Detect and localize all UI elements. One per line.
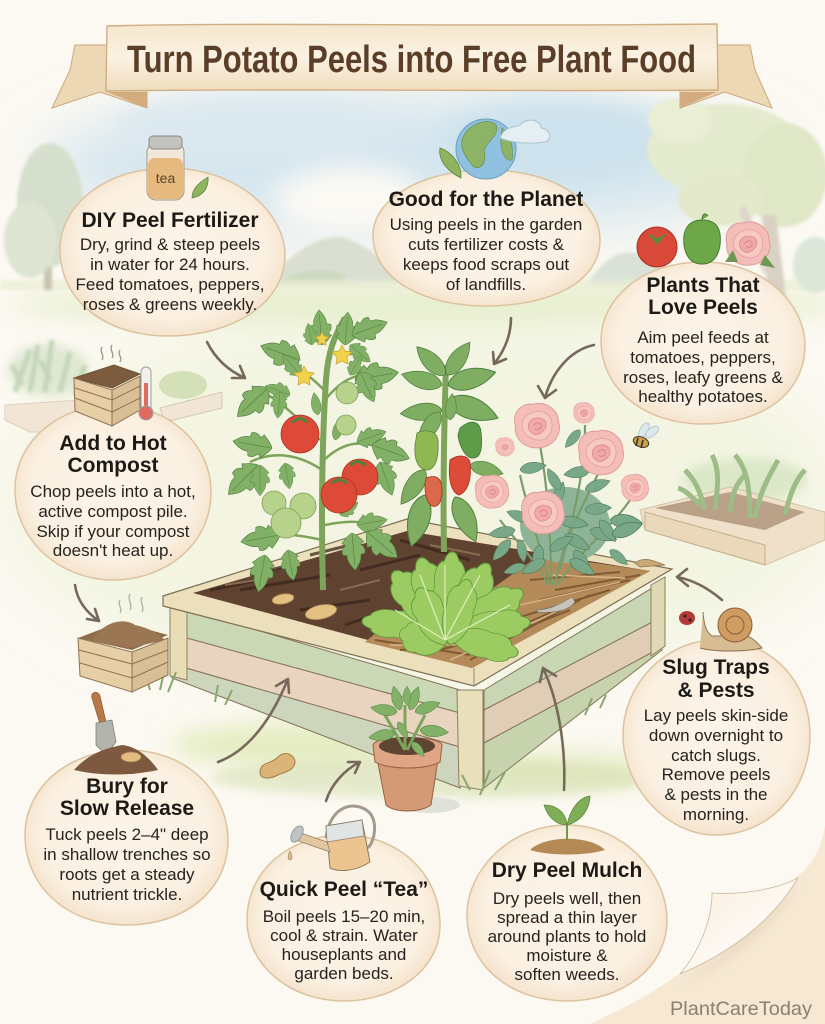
body text: down overnight to bbox=[649, 726, 783, 745]
body text: Dry, grind & steep peels bbox=[80, 235, 260, 254]
bed: soil bbox=[193, 531, 650, 668]
body text: & pests in the bbox=[664, 785, 768, 804]
body text: catch slugs. bbox=[671, 746, 761, 765]
peppers bbox=[415, 431, 438, 470]
green tomatoes bbox=[262, 382, 358, 538]
icon: tomato bbox=[637, 227, 677, 267]
body text bbox=[75, 235, 265, 314]
body text: Skip if your compost bbox=[36, 522, 190, 541]
potatoes in soil bbox=[271, 592, 338, 622]
icon: compost crate bbox=[74, 365, 140, 426]
banner: main strip bbox=[106, 24, 718, 91]
banner: right ribbon tail bbox=[680, 45, 772, 108]
body text: Using peels in the garden bbox=[390, 215, 582, 234]
heading: Compost bbox=[68, 454, 158, 477]
arrow: mulch to bed bbox=[540, 668, 564, 790]
body text bbox=[43, 825, 211, 904]
panel: good for the planet bbox=[373, 119, 600, 306]
heading: Dry Peel Mulch bbox=[492, 859, 642, 882]
bed: right face planks bbox=[484, 582, 662, 788]
ground potato bbox=[260, 754, 295, 778]
body text: Dry peels well, then bbox=[493, 889, 641, 908]
tomato plant bbox=[219, 309, 413, 594]
bed: corner posts bbox=[170, 605, 187, 680]
icon: globe with leaf and cloud bbox=[440, 119, 550, 179]
slug on mulch bbox=[536, 597, 575, 612]
red tomatoes bbox=[281, 415, 378, 513]
body text: Remove peels bbox=[662, 765, 770, 784]
heading: Slow Release bbox=[60, 797, 194, 820]
icon: snail bbox=[700, 608, 762, 651]
heading bbox=[60, 775, 194, 820]
body text: active compost pile. bbox=[38, 502, 188, 521]
bed: rim bbox=[163, 519, 672, 686]
title banner bbox=[52, 24, 772, 108]
body text bbox=[488, 889, 646, 984]
body text: Boil peels 15–20 min, bbox=[263, 907, 425, 926]
body text: keeps food scraps out bbox=[403, 255, 569, 274]
body text: garden beds. bbox=[294, 964, 394, 983]
body text: in water for 24 hours. bbox=[90, 255, 250, 274]
arrow: fertilizer to plants bbox=[207, 342, 245, 378]
body text: nutrient trickle. bbox=[72, 885, 182, 904]
tomato flowers bbox=[294, 332, 352, 385]
icon: trowel bbox=[92, 692, 116, 755]
icon: bee bbox=[632, 421, 661, 449]
body text: Tuck peels 2–4" deep bbox=[45, 825, 209, 844]
page curl bbox=[590, 825, 825, 1024]
background garden bed: right bbox=[640, 455, 825, 565]
heading: Good for the Planet bbox=[389, 188, 583, 211]
body text: in shallow trenches so bbox=[43, 845, 211, 864]
body text: soften weeds. bbox=[515, 965, 619, 984]
panel: DIY peel fertilizer bbox=[60, 136, 285, 336]
banner: left ribbon tail bbox=[52, 45, 147, 108]
arrow: plants that love peels bbox=[538, 345, 594, 398]
body text bbox=[263, 907, 425, 983]
icon: soil pile with potato bbox=[74, 745, 158, 774]
body text: Aim peel feeds at bbox=[637, 328, 769, 347]
panel: slug traps and pests bbox=[623, 608, 810, 835]
body text bbox=[30, 482, 196, 560]
watermark: PlantCareToday bbox=[670, 998, 812, 1020]
rose bush bbox=[475, 402, 649, 585]
heading bbox=[59, 432, 167, 477]
icon: steam bbox=[101, 345, 121, 362]
body text: tomatoes, peppers, bbox=[630, 348, 776, 367]
body text: healthy potatoes. bbox=[638, 387, 768, 406]
heading: & Pests bbox=[677, 679, 755, 702]
heading bbox=[646, 274, 760, 319]
body text: morning. bbox=[683, 805, 749, 824]
body text: spread a thin layer bbox=[497, 908, 637, 927]
icon: small compost bin bbox=[78, 594, 168, 692]
potted plant bbox=[368, 685, 460, 813]
distant hills bbox=[0, 237, 825, 290]
background tree: right bbox=[647, 98, 825, 330]
panel: add to hot compost bbox=[15, 345, 211, 580]
icon: ladybug bbox=[679, 611, 695, 625]
body text: roses & greens weekly. bbox=[83, 295, 257, 314]
body text bbox=[623, 328, 784, 406]
bed: soil texture bbox=[210, 540, 470, 625]
grass tufts bbox=[145, 668, 606, 795]
arrow: tea to pot bbox=[326, 762, 360, 801]
body text: roses, leafy greens & bbox=[623, 368, 784, 387]
icon: rose bbox=[725, 222, 775, 268]
body text: Feed tomatoes, peppers, bbox=[75, 275, 265, 294]
body text: doesn't heat up. bbox=[53, 541, 173, 560]
body text: houseplants and bbox=[282, 945, 406, 964]
lettuce bbox=[361, 551, 531, 667]
rose blooms bbox=[515, 403, 559, 448]
body text: Lay peels skin-side bbox=[644, 706, 788, 725]
heading: Slug Traps bbox=[662, 656, 770, 679]
heading bbox=[662, 656, 770, 702]
heading: Quick Peel “Tea” bbox=[260, 878, 428, 901]
bed: mulch bbox=[365, 555, 650, 668]
body text bbox=[644, 706, 788, 824]
icon: tea jar bbox=[147, 136, 208, 200]
panel: bury for slow release bbox=[25, 692, 228, 925]
panel: plants that love peels bbox=[601, 214, 805, 424]
heading: Love Peels bbox=[648, 296, 758, 319]
body text: cool & strain. Water bbox=[270, 926, 418, 945]
pepper plant bbox=[394, 338, 505, 552]
heading: DIY Peel Fertilizer bbox=[81, 209, 259, 232]
icon: pepper bbox=[684, 214, 720, 264]
arrow: slug to bed bbox=[677, 569, 722, 600]
icon: tea jar: tea bbox=[156, 170, 175, 186]
title: Turn Potato Peels into Free Plant Food bbox=[127, 39, 696, 81]
heading: Bury for bbox=[86, 775, 168, 798]
slug on rim bbox=[635, 559, 665, 567]
body text: of landfills. bbox=[446, 275, 526, 294]
heading: Plants That bbox=[646, 274, 760, 297]
raised garden bed bbox=[145, 519, 672, 798]
body text: roots get a steady bbox=[59, 865, 195, 884]
arrow: bury to bed bbox=[218, 679, 289, 762]
background garden bed: left bbox=[5, 340, 222, 432]
arrow: compost to bin bbox=[75, 585, 99, 621]
icon: sprout in mulch bbox=[530, 796, 605, 854]
body text: cuts fertilizer costs & bbox=[408, 235, 565, 254]
background tree: left bbox=[4, 143, 83, 290]
arrow: planet to plants bbox=[493, 318, 511, 364]
body text: moisture & bbox=[526, 946, 608, 965]
icon: watering can bbox=[288, 806, 375, 870]
body text: around plants to hold bbox=[488, 927, 646, 946]
body text bbox=[390, 215, 582, 294]
panel: quick peel tea bbox=[247, 806, 440, 1001]
body text: Chop peels into a hot, bbox=[30, 482, 196, 501]
bed: left face planks bbox=[172, 605, 460, 788]
heading: Add to Hot bbox=[59, 432, 167, 455]
icon: thermometer bbox=[139, 367, 153, 420]
panel: dry peel mulch bbox=[467, 796, 667, 1001]
